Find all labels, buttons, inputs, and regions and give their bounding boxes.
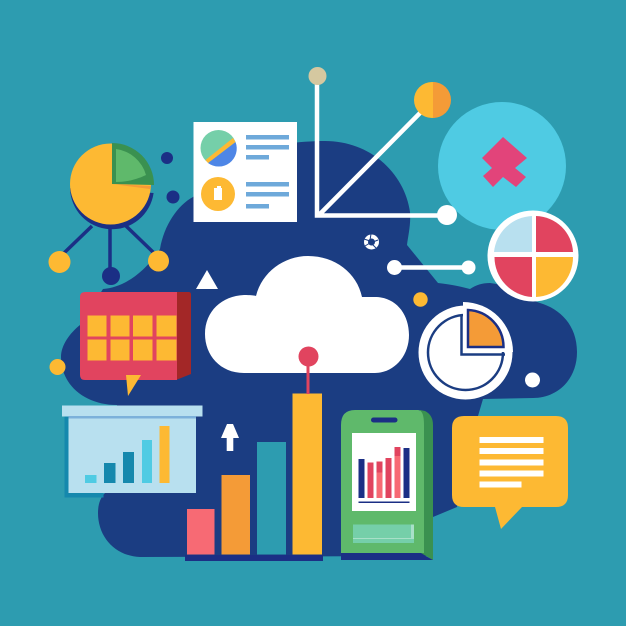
navy dots bbox=[161, 152, 180, 204]
panel: report card bbox=[194, 122, 297, 222]
left yellow dot bbox=[50, 359, 66, 375]
phone with chart bbox=[341, 410, 433, 560]
axis lines with nodes bbox=[308, 67, 457, 225]
calendar block bbox=[80, 292, 191, 396]
navy cloud background bbox=[61, 141, 577, 557]
small dotted wheel icon bbox=[364, 234, 379, 250]
main bar chart bbox=[185, 394, 323, 561]
up arrow bbox=[221, 424, 239, 451]
yellow dot bbox=[413, 292, 428, 307]
white cloud bbox=[205, 256, 409, 373]
red pin bbox=[298, 346, 318, 394]
white dot bbox=[525, 372, 540, 388]
speech bubble bbox=[452, 416, 568, 529]
presentation board chart bbox=[62, 406, 202, 498]
connector line bbox=[387, 260, 476, 275]
icon: pink diamond marker bbox=[482, 137, 527, 187]
light blue circle bbox=[438, 102, 566, 230]
pie chart with hub bbox=[48, 143, 169, 285]
pie chart outline icon bbox=[418, 302, 513, 400]
four segment circle chart bbox=[488, 210, 578, 302]
white triangle bbox=[196, 270, 218, 289]
